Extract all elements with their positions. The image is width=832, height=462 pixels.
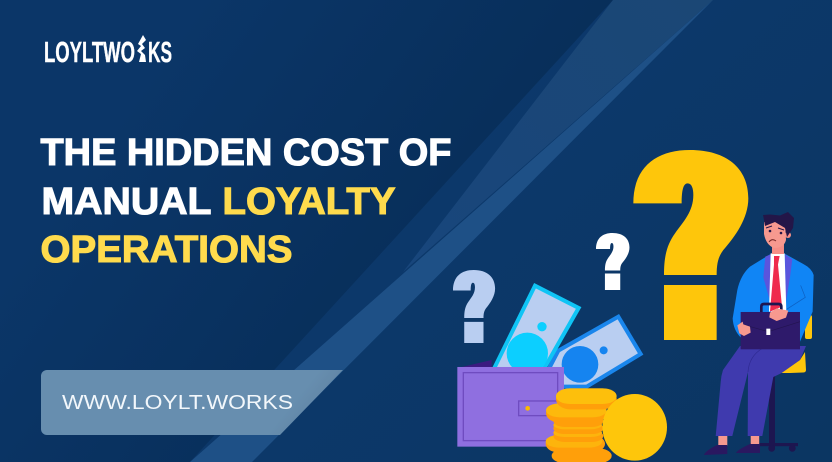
url badge [41,370,343,435]
ankles [718,434,759,446]
coin stack [546,388,617,462]
title: MANUAL [42,181,212,223]
title: LOYALTY [222,181,396,223]
chair [750,315,812,452]
shoes [704,444,760,455]
title [40,132,452,271]
banknotes and wallet [457,286,641,447]
icon: pale blue question mark [453,270,495,343]
logo: LOYLTWORKS: KS [148,37,172,69]
torso and jacket [733,243,814,349]
illustration: seated man with briefcase [704,212,814,455]
illustration: wallet with banknotes and coins [457,286,667,462]
icon: small white question mark [596,233,629,290]
logo: LOYLTWORKS: LOYLTWO [44,37,135,69]
title: THE HIDDEN COST OF [40,132,452,174]
url badge: WWW.LOYLT.WORKS [62,392,293,414]
title: OPERATIONS [40,229,292,271]
large coin [602,394,667,461]
legs [716,346,806,436]
head [763,212,794,248]
icon: large yellow question mark [633,150,748,340]
